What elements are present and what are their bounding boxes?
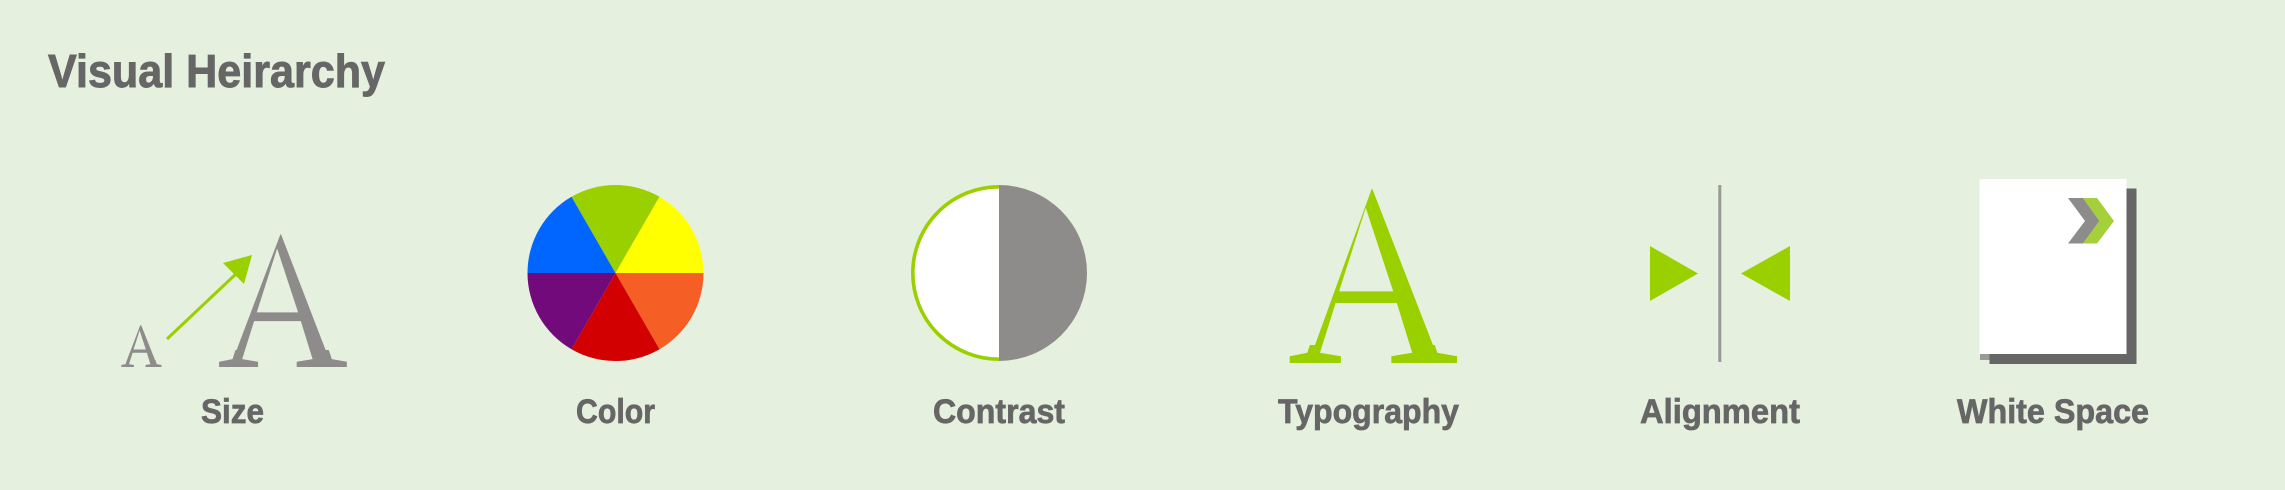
label: white space: White Space	[1957, 393, 2149, 431]
icon: half-and-half circle	[913, 185, 1087, 361]
icon: page with shadow	[1980, 179, 2136, 364]
panel: size	[121, 234, 347, 424]
arrow: growing size	[167, 255, 252, 339]
label: typography: Typography	[1278, 393, 1459, 431]
icon: left triangle	[1650, 246, 1698, 301]
icon: chevrons	[2068, 198, 2114, 244]
icon: right triangle	[1741, 246, 1790, 301]
label: contrast: Contrast	[933, 393, 1065, 431]
label: size: Size	[201, 393, 264, 431]
icon: serif letter A: A	[1287, 130, 1459, 421]
label: alignment: Alignment	[1640, 393, 1800, 431]
icon: small letter A: A	[121, 312, 162, 381]
panel: white space	[1957, 179, 2149, 431]
icon: large letter A: A	[217, 188, 348, 411]
label: color: Color	[576, 393, 655, 431]
panel: contrast	[913, 185, 1087, 431]
icon: color wheel	[528, 185, 704, 361]
panel: alignment	[1640, 185, 1800, 431]
panel: typography	[1278, 189, 1460, 430]
title: Visual Heirarchy	[48, 45, 385, 97]
panel: color	[528, 185, 704, 431]
icon: alignment axis	[1718, 185, 1721, 362]
